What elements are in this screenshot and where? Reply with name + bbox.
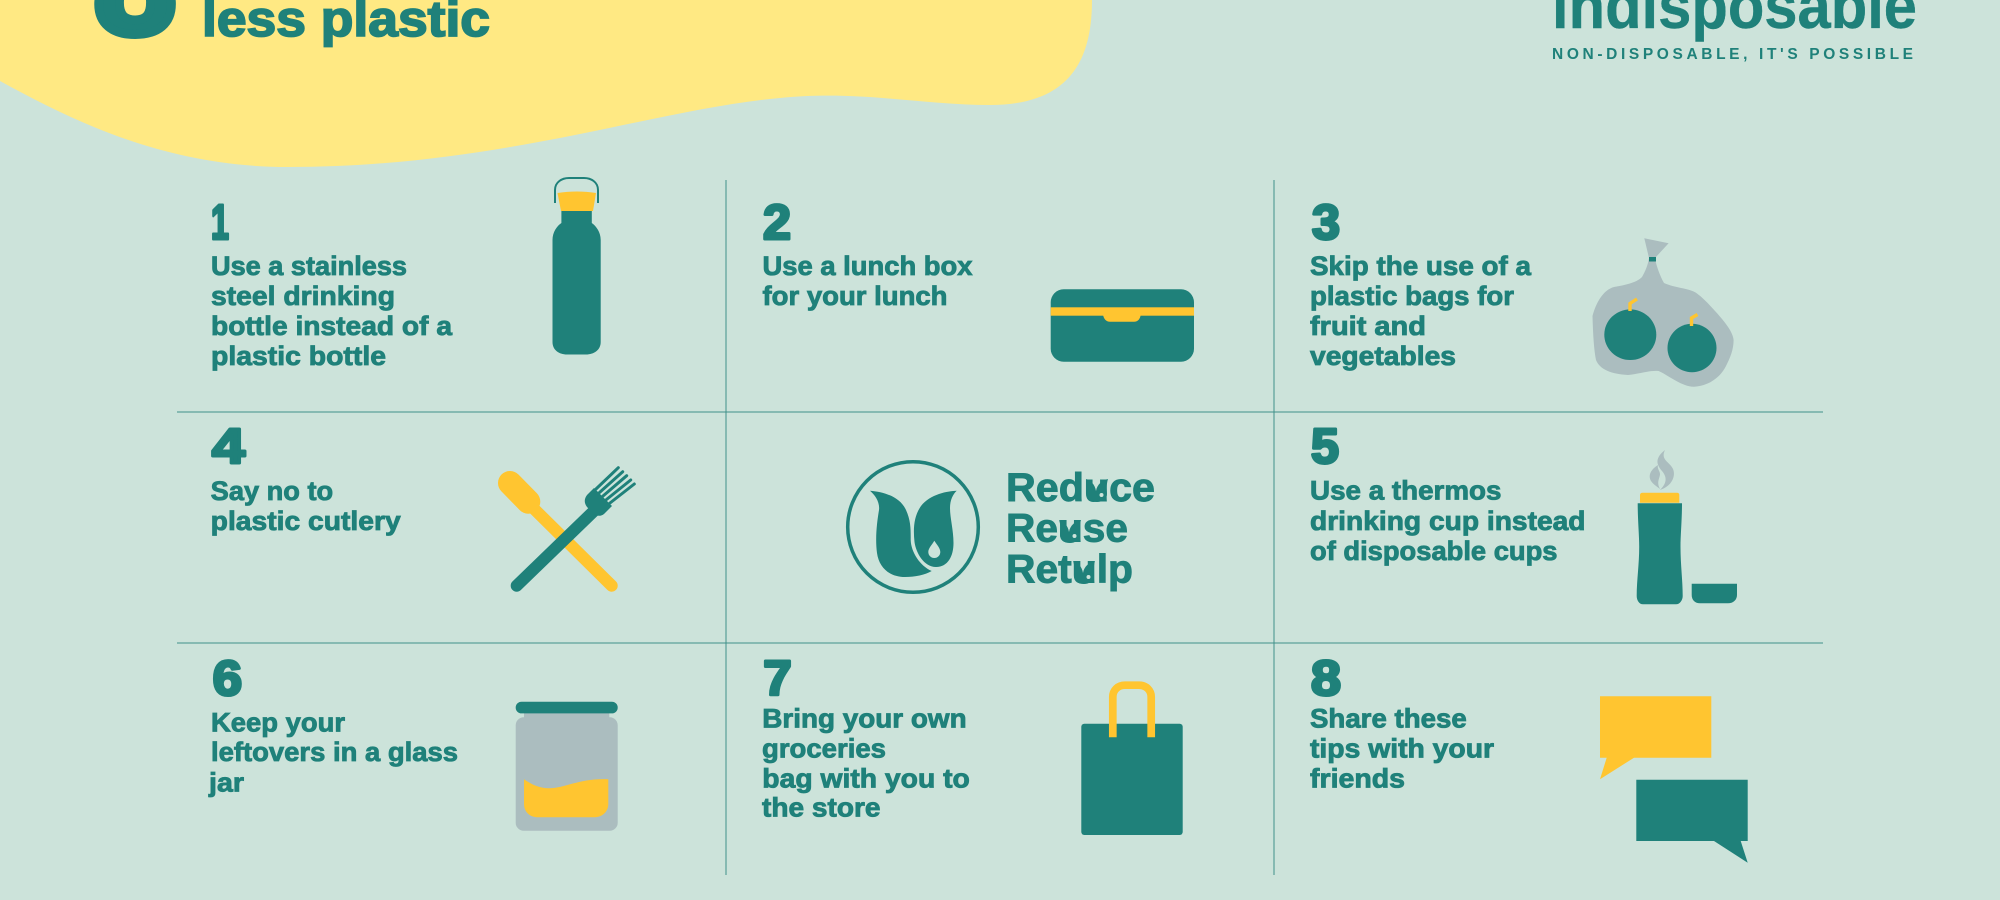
- tip 8 text: friends: [1310, 763, 1405, 793]
- tip 4 number: 4: [212, 420, 245, 474]
- logo wordmark: Reduce: [1006, 466, 1155, 510]
- tip 8 text: tips with your: [1310, 733, 1494, 763]
- tip 6: [208, 652, 618, 831]
- tip 6 text: Keep your: [211, 708, 345, 738]
- tip 6 text: leftovers in a glass: [211, 737, 458, 767]
- tip 5 text: drinking cup instead: [1310, 506, 1586, 536]
- tip 7 number: 7: [763, 652, 792, 706]
- tip 1 text: steel drinking: [211, 281, 395, 311]
- tip 4 text: plastic cutlery: [211, 506, 401, 536]
- tip 7 text: the store: [762, 793, 880, 823]
- tip 2: [762, 196, 1194, 362]
- tip 1 text: bottle instead of a: [211, 311, 452, 341]
- yellow header blob: [0, 0, 1092, 167]
- tip 3 text: vegetables: [1310, 341, 1456, 371]
- tip 7: [762, 652, 1183, 835]
- tip 3 text: plastic bags for: [1310, 281, 1514, 311]
- tip 7 text: [762, 703, 970, 823]
- tip 2 text: Use a lunch box: [762, 251, 973, 281]
- tip 7 text: groceries: [762, 733, 886, 763]
- tulip letter in retulp: [1073, 561, 1095, 584]
- tip 5 text: Use a thermos: [1310, 476, 1502, 506]
- icon: speech bubbles: [1600, 696, 1748, 863]
- tip 5: [1310, 420, 1737, 604]
- tip 6 text: jar: [208, 768, 244, 798]
- tip 8 number: 8: [1311, 652, 1341, 706]
- icon: crossed spoon and fork: [510, 468, 634, 586]
- tip 6 text: [208, 708, 458, 798]
- center logo: reduce reuse retulp: [848, 462, 1155, 592]
- tip 6 number: 6: [213, 652, 242, 706]
- tip 1: [211, 178, 601, 371]
- tip 1 number: 1: [211, 196, 229, 250]
- icon: produce bag with fruit: [1592, 238, 1734, 387]
- tip 3 text: fruit and: [1310, 311, 1426, 341]
- icon: glass jar: [516, 702, 618, 831]
- tip 8 text: [1310, 703, 1494, 793]
- tip 2 text: [762, 251, 973, 311]
- tip 4: [211, 420, 634, 586]
- title: [94, 0, 490, 65]
- tip 3 text: [1310, 251, 1531, 371]
- tip 3 text: Skip the use of a: [1310, 251, 1531, 281]
- logo emblem: [848, 462, 978, 592]
- tip 2 number: 2: [763, 196, 791, 250]
- tip 1 text: Use a stainless: [211, 251, 407, 281]
- icon: thermos and cup: [1637, 450, 1737, 604]
- tip 1 text: [211, 251, 452, 371]
- tip 5 text: of disposable cups: [1310, 536, 1558, 566]
- tip 1 text: plastic bottle: [211, 341, 386, 371]
- tip 3: [1310, 196, 1734, 387]
- tip 2 text: for your lunch: [762, 281, 948, 311]
- tip 7 text: bag with you to: [762, 763, 970, 793]
- icon: tote bag: [1081, 685, 1183, 835]
- tip 4 text: [211, 476, 401, 536]
- tip 8 text: Share these: [1310, 703, 1467, 733]
- logo wordmark: Retulp: [1006, 548, 1133, 592]
- tip 7 text: Bring your own: [762, 703, 967, 733]
- icon: lunch box: [1051, 289, 1194, 362]
- tulip letter in reduce: [1086, 479, 1108, 502]
- logo wordmark: [1006, 466, 1155, 592]
- tip 5 number: 5: [1311, 420, 1339, 474]
- icon: steel bottle: [552, 178, 601, 354]
- tip 3 number: 3: [1312, 196, 1340, 250]
- logo wordmark: Reuse: [1006, 507, 1128, 551]
- tip 5 text: [1310, 476, 1586, 566]
- tip 8: [1310, 652, 1748, 863]
- tip 4 text: Say no to: [211, 476, 333, 506]
- brand logo: [1552, 0, 1917, 63]
- brand tagline: NON-DISPOSABLE, IT'S POSSIBLE: [1552, 46, 1913, 63]
- tulip letter in reuse: [1059, 520, 1081, 543]
